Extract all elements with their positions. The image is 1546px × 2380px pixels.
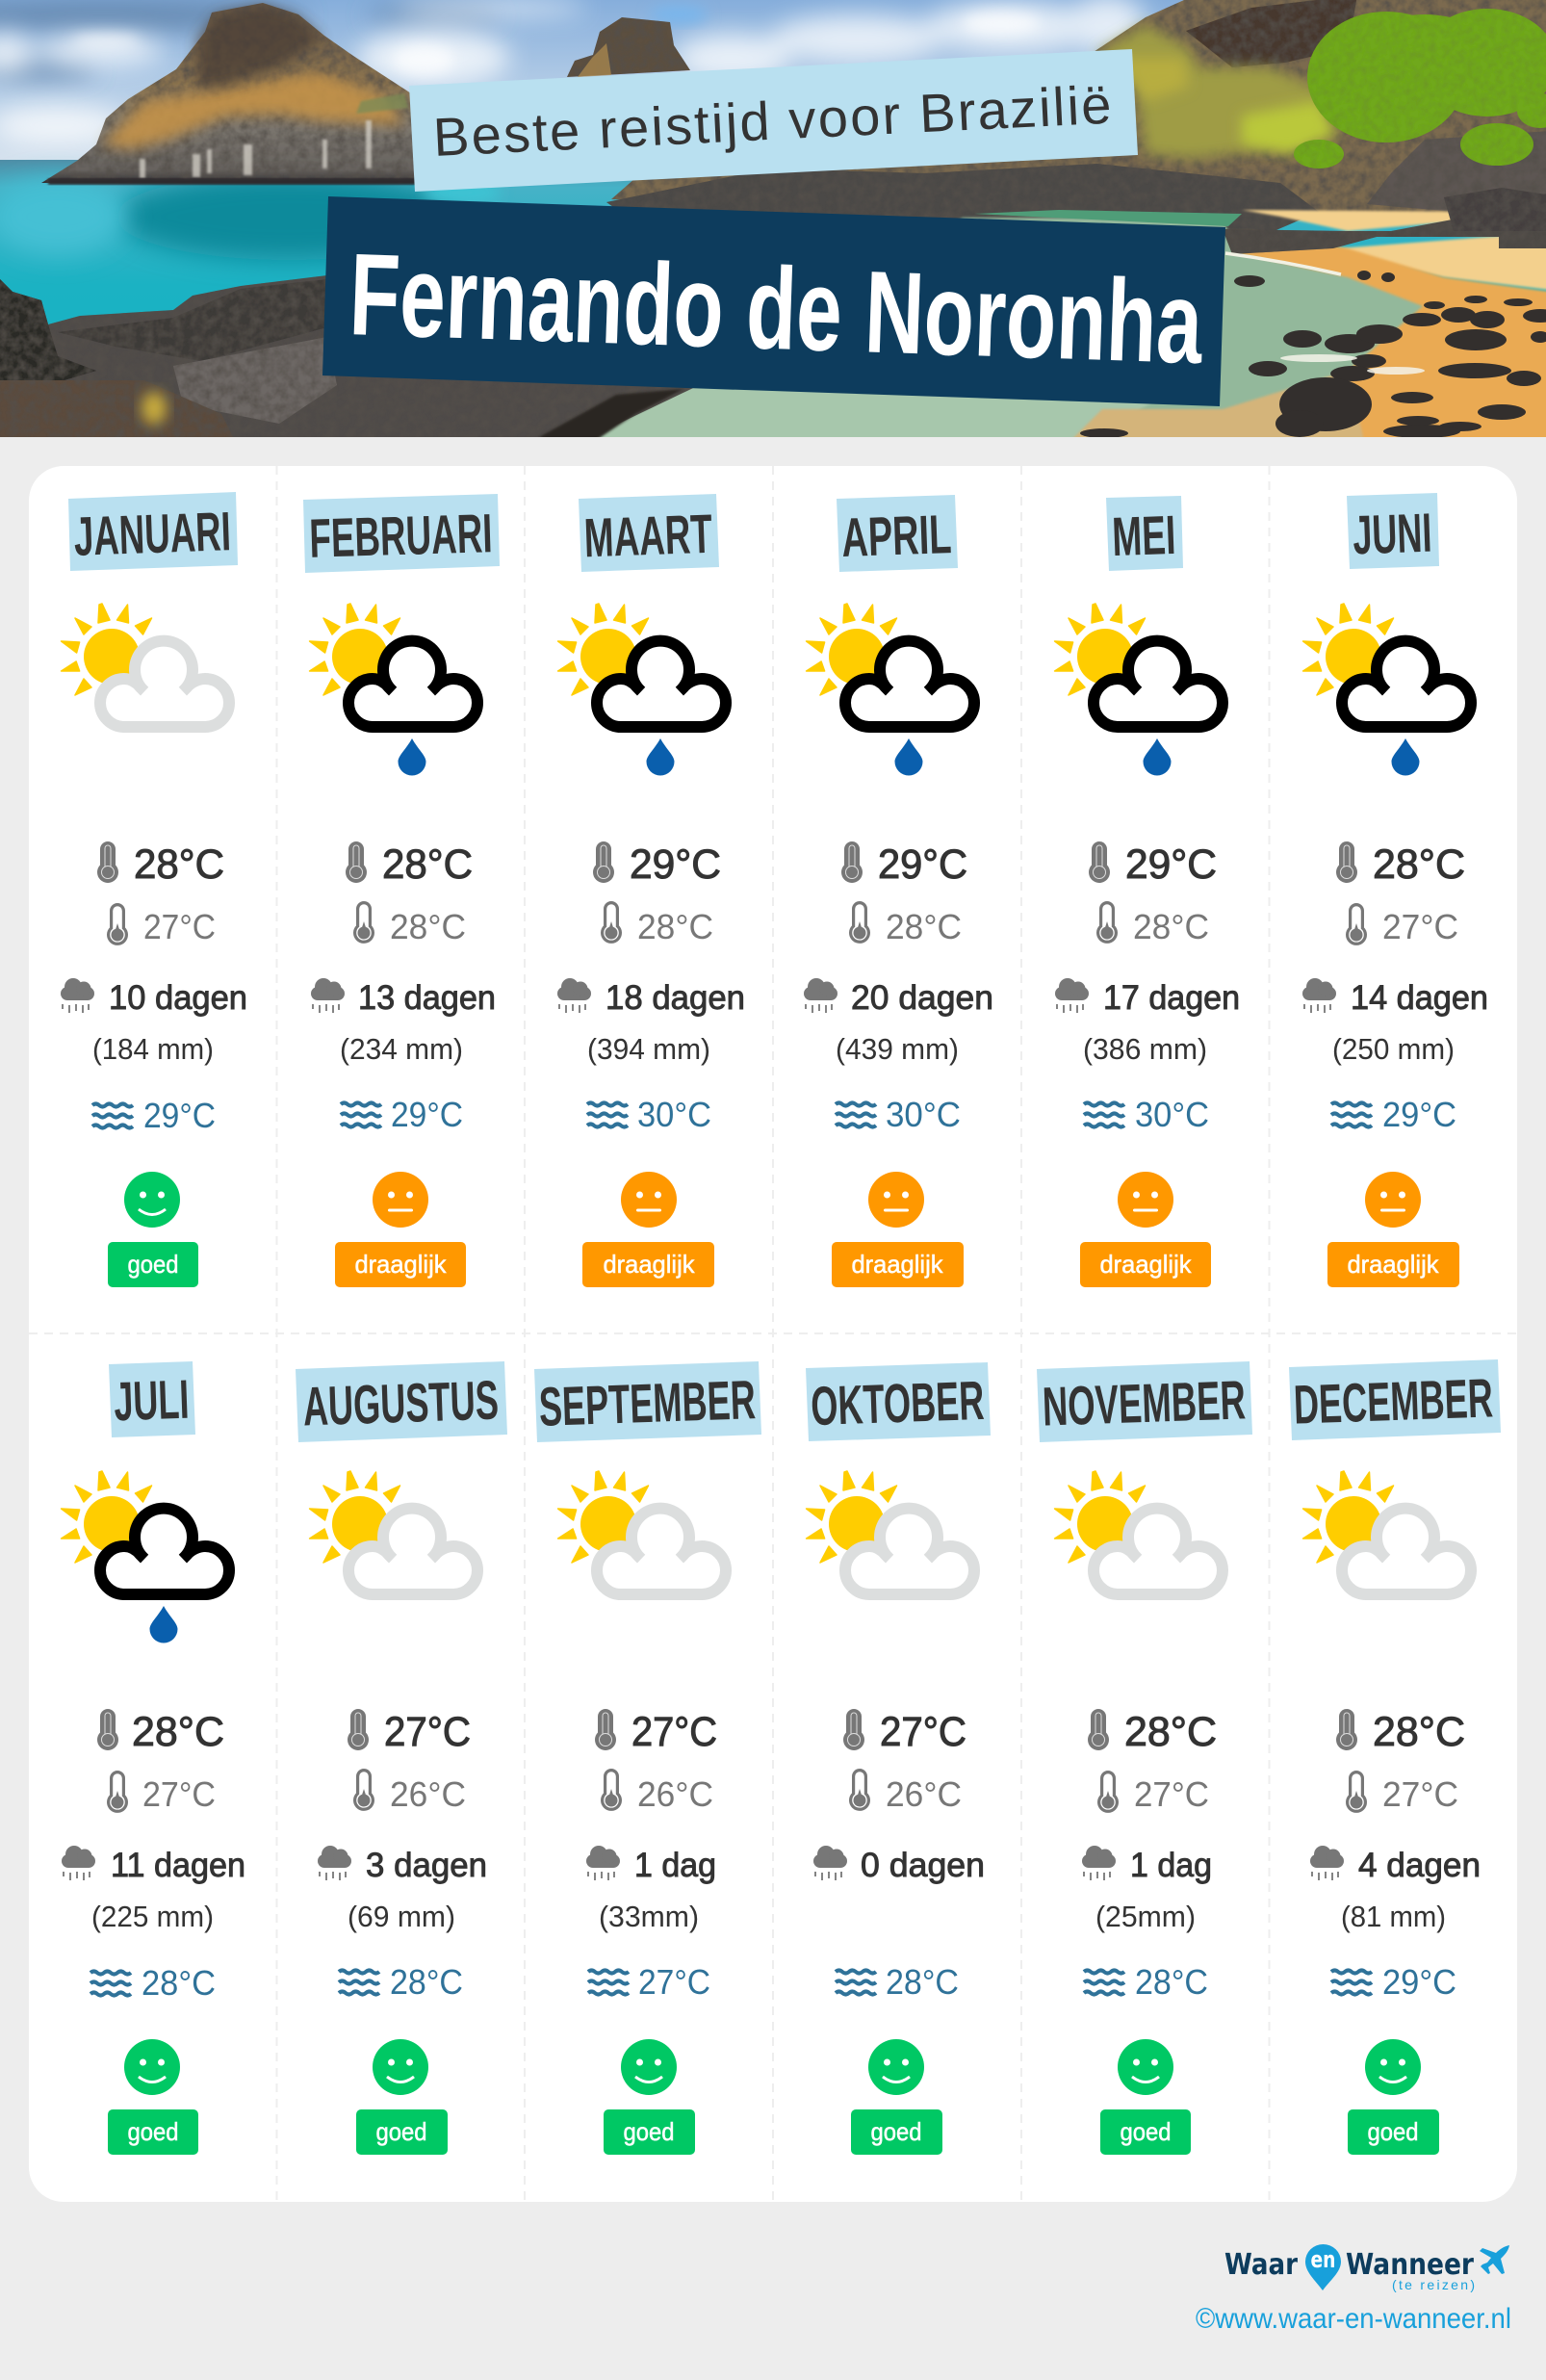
rating badge (604, 2109, 695, 2155)
month label (1347, 493, 1439, 569)
rainfall: (184 mm) (92, 1032, 214, 1066)
max temperature: 29°C (1125, 841, 1217, 888)
month label (806, 1362, 991, 1441)
icon: min temperature (1348, 1772, 1365, 1811)
rating badge: goed (624, 2117, 674, 2146)
icon: sun with grey cloud (310, 1471, 477, 1594)
icon: sea (1084, 1970, 1124, 1995)
rainfall: (250 mm) (1332, 1032, 1455, 1066)
rainfall: (394 mm) (587, 1032, 710, 1066)
rainfall: (81 mm) (1341, 1900, 1446, 1933)
sea temperature: 30°C (637, 1095, 711, 1134)
rain days: 17 dagen (1103, 979, 1240, 1017)
sea temperature: 30°C (886, 1095, 961, 1134)
website credit: ©www.waar-en-wanneer.nl (1196, 2303, 1511, 2335)
logo: Waar en Wanneer (1224, 2244, 1509, 2292)
icon: rating smiley (1365, 2039, 1421, 2095)
min temperature: 27°C (142, 1774, 216, 1814)
month label: FEBRUARI (309, 503, 493, 570)
month label: OKTOBER (810, 1370, 985, 1437)
panel: april (804, 495, 993, 1287)
sea temperature: 27°C (638, 1962, 710, 2002)
month label: JANUARI (73, 501, 232, 568)
min temperature: 27°C (143, 907, 216, 946)
min temperature: 26°C (637, 1774, 713, 1814)
panel: maart (557, 494, 745, 1287)
rainfall: (234 mm) (340, 1032, 463, 1066)
panel: oktober (806, 1362, 991, 2155)
icon: sea (836, 1103, 876, 1126)
sea temperature: 28°C (142, 1963, 216, 2003)
month label: JUNI (1352, 503, 1432, 566)
month label (837, 495, 958, 572)
rainfall: (386 mm) (1083, 1032, 1207, 1066)
icon: rating smiley (373, 2039, 428, 2095)
icon: sun with grey cloud (807, 1471, 974, 1594)
max temperature: 27°C (384, 1709, 471, 1755)
icon: sea (1331, 1103, 1372, 1126)
icon: max temperature (593, 841, 614, 883)
min temperature: 27°C (1134, 1774, 1209, 1814)
icon: rating smiley (373, 1172, 428, 1228)
icon: min temperature (603, 903, 620, 942)
icon: sun with grey cloud (1303, 1471, 1471, 1594)
rating badge: draaglijk (851, 1250, 943, 1279)
max temperature: 27°C (880, 1709, 966, 1755)
icon: rating smiley (1118, 1172, 1173, 1228)
rain days: 4 dagen (1358, 1847, 1481, 1884)
rating badge (1348, 2109, 1439, 2155)
icon: sun with rain cloud (1055, 604, 1223, 776)
rain days: 11 dagen (111, 1847, 245, 1884)
icon: map pin: en (1311, 2246, 1336, 2273)
rating badge (335, 1242, 466, 1287)
min temperature: 27°C (1382, 1774, 1458, 1814)
panel: januari (61, 492, 247, 1287)
month label (1106, 496, 1183, 571)
sea temperature: 28°C (390, 1962, 463, 2002)
rating badge (582, 1242, 714, 1287)
max temperature: 29°C (630, 841, 721, 888)
rainfall: (225 mm) (91, 1900, 214, 1933)
icon: sun with rain cloud (807, 604, 974, 776)
icon: max temperature (97, 1709, 118, 1750)
month label: MEI (1111, 504, 1176, 568)
icon: max temperature (348, 1709, 369, 1750)
rain days: 18 dagen (606, 979, 745, 1017)
icon: max temperature (1336, 841, 1357, 883)
icon: rating smiley (868, 1172, 924, 1228)
rating badge (108, 1242, 198, 1287)
min temperature: 26°C (390, 1774, 466, 1814)
month label: SEPTEMBER (538, 1369, 757, 1438)
icon: sun with rain cloud (310, 604, 477, 776)
rating badge: draaglijk (603, 1250, 695, 1279)
icon: min temperature (603, 1771, 620, 1809)
sea temperature: 28°C (886, 1962, 959, 2002)
min temperature: 28°C (637, 907, 713, 946)
icon: rating smiley (1365, 1172, 1421, 1228)
icon: max temperature (1088, 1709, 1109, 1750)
rain days: 3 dagen (366, 1847, 487, 1884)
icon: rating smiley (621, 2039, 677, 2095)
icon: min temperature (109, 905, 126, 944)
rating badge: goed (870, 2117, 922, 2146)
icon: max temperature (841, 841, 863, 883)
icon: rain (1082, 1846, 1116, 1880)
panel: augustus (296, 1361, 507, 2155)
max temperature: 28°C (1373, 841, 1465, 888)
title banner: Fernando de Noronha (348, 228, 1205, 388)
icon: max temperature (843, 1709, 864, 1750)
icon: sea (588, 1970, 629, 1995)
icon: min temperature (355, 903, 373, 942)
rain days: 1 dag (1130, 1847, 1212, 1884)
panel: juni (1302, 493, 1488, 1287)
panel: februari (303, 494, 500, 1287)
icon: sun with rain cloud (558, 604, 726, 776)
icon: sea (92, 1103, 133, 1128)
sea temperature: 28°C (1135, 1962, 1208, 2002)
rating badge: goed (1367, 2117, 1419, 2146)
icon: map pin (1305, 2244, 1341, 2290)
panel: december (1289, 1359, 1501, 2155)
sea temperature: 29°C (143, 1096, 216, 1135)
icon: min temperature (1098, 903, 1116, 942)
rating badge (851, 2109, 942, 2155)
icon: sun with rain cloud (1303, 604, 1471, 776)
rainfall: (33mm) (599, 1900, 699, 1933)
rating badge (832, 1242, 964, 1287)
rating badge (1327, 1242, 1459, 1287)
icon: min temperature (851, 1771, 868, 1809)
month label: MAART (583, 504, 713, 569)
icon: rain (1302, 978, 1336, 1013)
icon: sun with grey cloud (62, 604, 229, 727)
panel: september (534, 1361, 761, 2155)
max temperature: 28°C (1373, 1709, 1465, 1755)
icon: rain (557, 978, 591, 1013)
max temperature: 28°C (1124, 1709, 1217, 1755)
rating badge (1100, 2109, 1191, 2155)
icon: max temperature (595, 1709, 616, 1750)
rating badge: draaglijk (1348, 1250, 1439, 1279)
title banner (322, 196, 1225, 406)
month label: NOVEMBER (1042, 1369, 1247, 1438)
icon: rain (813, 1846, 847, 1880)
month label: AUGUSTUS (302, 1369, 500, 1438)
rain days: 13 dagen (358, 979, 496, 1017)
icon: min temperature (1099, 1772, 1117, 1811)
icon: max temperature (1336, 1709, 1357, 1750)
max temperature: 28°C (132, 1709, 224, 1755)
rating badge: goed (1121, 2117, 1171, 2146)
month label (303, 494, 500, 573)
max temperature: 27°C (631, 1709, 717, 1755)
icon: rating smiley (124, 1172, 180, 1228)
icon: rating smiley (868, 2039, 924, 2095)
min temperature: 28°C (390, 907, 466, 946)
icon: rain (804, 978, 837, 1013)
icon: rain (318, 1846, 351, 1880)
min temperature: 27°C (1382, 907, 1458, 946)
panel: mei (1055, 496, 1240, 1287)
rating badge: draaglijk (1099, 1250, 1192, 1279)
hero photo: island landscape (0, 0, 1546, 453)
rating badge: draaglijk (354, 1250, 447, 1279)
icon: sea (339, 1970, 379, 1995)
icon: rating smiley (621, 1172, 677, 1228)
month label (296, 1361, 507, 1442)
icon: min temperature (109, 1772, 126, 1811)
icon: rating smiley (124, 2039, 180, 2095)
icon: max temperature (97, 841, 118, 883)
sea temperature: 29°C (1382, 1962, 1456, 2002)
icon: sea (1331, 1970, 1372, 1995)
rating badge: goed (127, 2117, 179, 2146)
icon: rain (311, 978, 345, 1013)
month label (1037, 1361, 1252, 1442)
min temperature: 26°C (886, 1774, 962, 1814)
logo: Waar en Wanneer: Wanneer (1346, 2248, 1474, 2282)
icon: rating smiley (1118, 2039, 1173, 2095)
rain days: 1 dag (634, 1847, 716, 1884)
icon: sea (341, 1103, 381, 1126)
rating badge: goed (375, 2117, 427, 2146)
icon: max temperature (346, 841, 367, 883)
max temperature: 28°C (382, 841, 473, 888)
icon: sun with grey cloud (558, 1471, 726, 1594)
icon: max temperature (1089, 841, 1110, 883)
icon: rain (62, 1846, 95, 1880)
icon: sea (90, 1972, 131, 1995)
panel: juli (62, 1361, 245, 2155)
icon: min temperature (355, 1771, 373, 1809)
icon: rain (1055, 978, 1089, 1013)
max temperature: 29°C (878, 841, 967, 888)
icon: sun with rain cloud (62, 1471, 229, 1643)
month label: APRIL (840, 504, 952, 569)
subtitle banner: Beste reistijd voor Brazilië (432, 74, 1113, 168)
icon: rain (1310, 1846, 1344, 1880)
icon: sea (1084, 1103, 1124, 1126)
rainfall: (439 mm) (836, 1032, 959, 1066)
icon: rain (586, 1846, 620, 1880)
icon: plane (1480, 2245, 1509, 2274)
sea temperature: 29°C (391, 1095, 463, 1134)
logo: Waar en Wanneer: (te reizen) (1392, 2277, 1475, 2292)
logo: Waar en Wanneer: Waar (1224, 2248, 1298, 2282)
rating badge (1080, 1242, 1211, 1287)
rating badge: goed (127, 1250, 179, 1279)
month label (579, 494, 719, 572)
max temperature: 28°C (134, 841, 224, 888)
month label: JULI (113, 1369, 190, 1433)
icon: sea (836, 1970, 876, 1995)
icon: sea (587, 1103, 628, 1126)
sea temperature: 29°C (1382, 1095, 1456, 1134)
icon: min temperature (851, 903, 868, 942)
subtitle banner (409, 49, 1138, 192)
rain days: 0 dagen (861, 1847, 985, 1884)
panel: climate card (29, 466, 1517, 2202)
rainfall: (25mm) (1095, 1900, 1196, 1933)
rating badge (356, 2109, 448, 2155)
icon: rain (61, 978, 94, 1013)
icon: sun with grey cloud (1055, 1471, 1223, 1594)
rain days: 20 dagen (851, 979, 993, 1017)
month label (534, 1361, 761, 1442)
month label (68, 492, 238, 571)
rain days: 10 dagen (109, 979, 247, 1017)
rating badge (108, 2109, 198, 2155)
panel: november (1037, 1361, 1252, 2155)
min temperature: 28°C (886, 907, 962, 946)
rain days: 14 dagen (1351, 979, 1488, 1017)
rainfall: (69 mm) (348, 1900, 455, 1933)
min temperature: 28°C (1133, 907, 1209, 946)
sea temperature: 30°C (1135, 1095, 1209, 1134)
icon: min temperature (1348, 905, 1365, 944)
month label (109, 1361, 195, 1437)
